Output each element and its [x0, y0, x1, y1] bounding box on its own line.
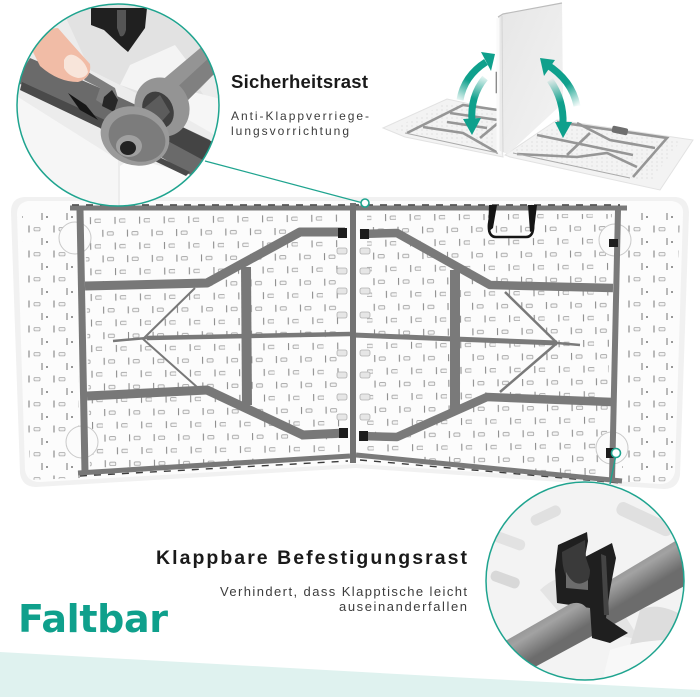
axle	[144, 95, 170, 121]
steel frame, left half	[70, 208, 350, 473]
section text: Anti-Klappverriegelung	[231, 109, 369, 138]
steel tube, front section	[506, 602, 586, 664]
standing panel	[498, 3, 563, 154]
centre hinge recesses	[337, 248, 370, 420]
mini strap	[611, 125, 628, 136]
section text: Verhindert	[220, 584, 467, 614]
title: Faltbar: Faltbar	[18, 597, 168, 641]
black handle	[497, 73, 502, 92]
black clip	[91, 8, 147, 52]
steel frame, right half	[353, 208, 627, 481]
finger	[30, 28, 90, 82]
square tube	[164, 48, 214, 100]
plastic recesses	[530, 506, 561, 526]
section text: Verhindert: auseinanderfallen	[339, 599, 467, 614]
black pipe ends	[338, 228, 618, 458]
mini frame	[405, 105, 667, 178]
section text: Anti-Klappverriegelung: lungsvorrichtung	[231, 124, 349, 138]
background band	[0, 652, 700, 697]
steel tube, rear	[536, 541, 684, 666]
centre post	[350, 203, 356, 463]
white table body	[18, 98, 118, 205]
section heading: Klappbare Befestigungsrast: Klappbare Befestigungsrast	[156, 547, 468, 569]
corner bosses	[59, 222, 631, 464]
table top surface	[11, 197, 689, 489]
section text: Verhindert: Verhindert, dass Klapptische leicht	[220, 584, 467, 599]
edge dashes	[72, 205, 620, 483]
folded table seen from below	[11, 197, 689, 489]
rear washer	[134, 78, 190, 136]
table underside	[66, 5, 206, 94]
front washer	[100, 106, 170, 166]
folding table illustration	[383, 3, 693, 190]
arrows	[460, 52, 577, 138]
connector line to folding clip detail	[610, 448, 620, 484]
detail circle: folding clip	[486, 482, 690, 690]
section text: Anti-Klappverriegelung: Anti-Klappverriege-	[231, 109, 369, 123]
section heading: Sicherheitsrast: Sicherheitsrast	[231, 71, 368, 92]
detail circle: safety lock	[16, 3, 220, 207]
connector line to safety lock detail	[205, 161, 369, 207]
dark rail	[20, 58, 210, 176]
black clip	[555, 532, 628, 643]
peg pattern	[22, 208, 680, 482]
carry handle strap	[489, 205, 533, 237]
table halves	[383, 99, 503, 157]
locking slider	[84, 72, 118, 104]
